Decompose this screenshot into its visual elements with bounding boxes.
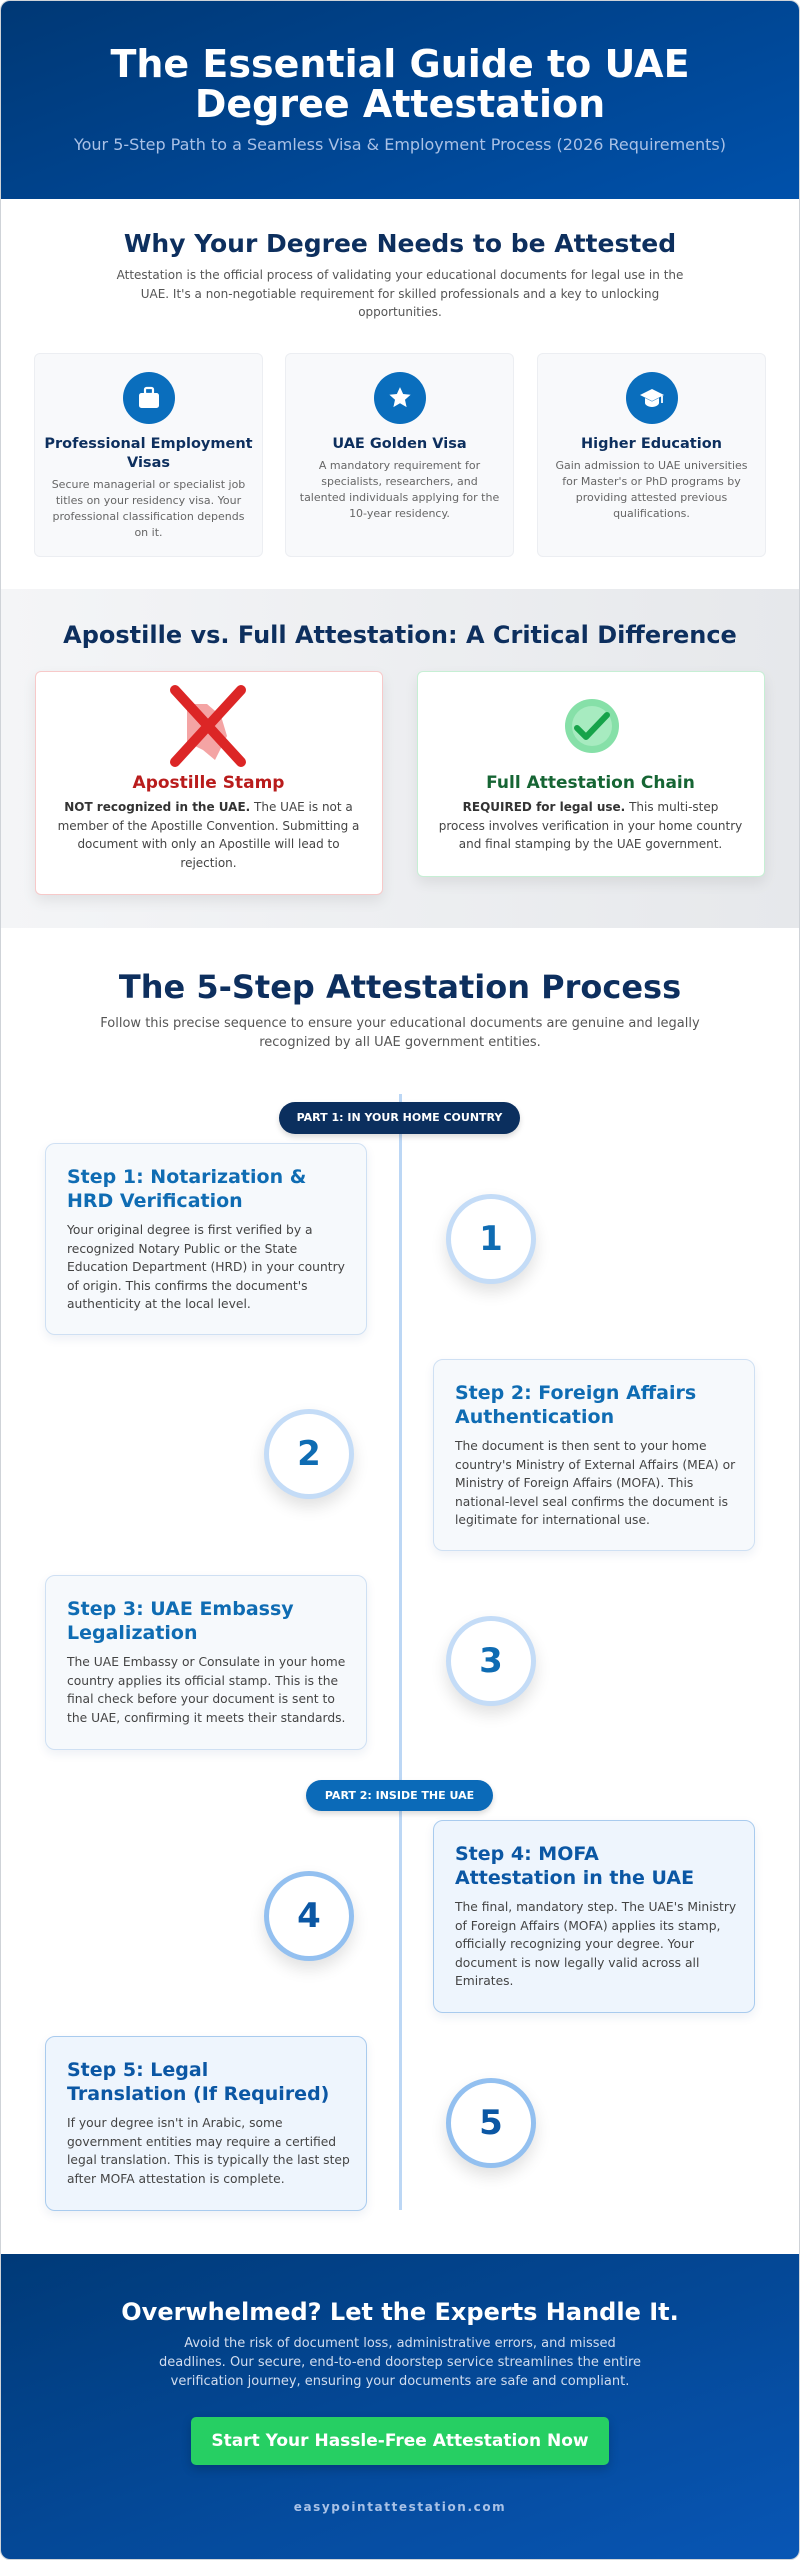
- card: higher education: providing attested previous: [576, 491, 727, 504]
- card: professional employment visas: Secure managerial or specialist job: [52, 478, 245, 491]
- step 5 card: Step 5: Legal: [67, 2059, 208, 2081]
- step 5 number: 5: [479, 2103, 503, 2143]
- apostille text: document with only an Apostille will lead to: [77, 837, 340, 851]
- heading: 5-step process: The 5-Step Attestation Process: [119, 968, 681, 1006]
- icon: check seal: [565, 699, 619, 753]
- process intro text: [100, 1016, 700, 1050]
- step 4 card: Emirates.: [455, 1974, 513, 1988]
- step 3 number: [446, 1616, 536, 1706]
- pill: part 1: [279, 1102, 520, 1134]
- title: Degree Attestation: [195, 82, 605, 126]
- step 2 card: Ministry of Foreign Affairs (MOFA). This: [455, 1476, 693, 1490]
- step 3 card: Step 3: UAE Embassy: [67, 1598, 294, 1620]
- icon: graduation cap: [626, 372, 678, 424]
- step 4 number: [264, 1871, 354, 1961]
- full attestation text: REQUIRED for legal use. This multi-step: [463, 800, 718, 814]
- icon: briefcase: [122, 372, 174, 424]
- process intro text: Follow this precise sequence to ensure your educational documents are genuine and legally: [100, 1016, 700, 1031]
- step 4 number: 4: [297, 1896, 321, 1936]
- CTA button: [191, 2417, 609, 2465]
- full attestation title: Full Attestation Chain: [486, 773, 695, 793]
- step 1 card: recognized Notary Public or the State: [67, 1242, 297, 1256]
- step 2 card: Step 2: Foreign Affairs: [455, 1382, 696, 1404]
- card: full attestation chain: [417, 671, 765, 877]
- card: higher education: Higher Education: [581, 436, 722, 452]
- CTA text: Avoid the risk of document loss, administrative errors, and missed: [184, 2336, 616, 2351]
- website url: easypointattestation.com: [294, 2500, 506, 2514]
- step 1 number: 1: [479, 1219, 503, 1259]
- step 1 card: Education Department (HRD) in your country: [67, 1260, 345, 1274]
- pill: part 1: PART 1: IN YOUR HOME COUNTRY: [297, 1111, 502, 1124]
- step 5 number: [446, 2078, 536, 2168]
- step 2 card: country's Ministry of External Affairs (MEA) or: [455, 1458, 735, 1472]
- card: golden visa: UAE Golden Visa: [332, 436, 467, 452]
- card: golden visa: A mandatory requirement for: [319, 459, 480, 472]
- card: professional employment visas: professional classification depends: [52, 510, 244, 523]
- step 1 card: of origin. This confirms the document's: [67, 1279, 308, 1293]
- step 5 card: after MOFA attestation is complete.: [67, 2172, 285, 2186]
- step 4 card: Attestation in the UAE: [455, 1867, 694, 1889]
- timeline line: [399, 1094, 402, 2210]
- card: golden visa: specialists, researchers, and: [321, 475, 478, 488]
- step 2 card: [433, 1359, 755, 1551]
- step 1 card: authenticity at the local level.: [67, 1297, 251, 1311]
- step 4 card: [433, 1820, 755, 2013]
- card: golden visa: [285, 353, 514, 557]
- step 3 card: country applies its official stamp. This is the: [67, 1674, 338, 1688]
- step 3 card: the UAE, confirming it meets their standards.: [67, 1711, 345, 1725]
- card: higher education: Gain admission to UAE universities: [555, 459, 748, 472]
- apostille text: member of the Apostille Convention. Submitting a: [58, 818, 359, 832]
- step 3 card: Legalization: [67, 1622, 198, 1644]
- step 5 card: [45, 2036, 367, 2211]
- step 2 number: [264, 1409, 354, 1499]
- full attestation text: and final stamping by the UAE government.: [459, 837, 722, 851]
- card: higher education: [537, 353, 766, 557]
- apostille text: rejection.: [180, 856, 237, 870]
- card: golden visa: talented individuals applying for the: [300, 491, 499, 504]
- apostille text: [58, 800, 359, 870]
- card: golden visa: 10-year residency.: [349, 507, 450, 520]
- CTA text: [159, 2336, 641, 2389]
- step 2 card: legitimate for international use.: [455, 1513, 650, 1527]
- step 4 card: The final, mandatory step. The UAE's Ministry: [455, 1900, 736, 1914]
- step 2 number: 2: [297, 1434, 321, 1474]
- card: professional employment visas: [34, 353, 263, 557]
- pill: part 2: PART 2: INSIDE THE UAE: [325, 1789, 474, 1802]
- intro text: [116, 268, 683, 319]
- card: apostille stamp: [35, 671, 383, 895]
- step 4 card: of Foreign Affairs (MOFA) applies its stamp,: [455, 1919, 720, 1933]
- CTA text: deadlines. Our secure, end-to-end doorstep service streamlines the entire: [159, 2355, 641, 2370]
- card: professional employment visas: on it.: [134, 526, 163, 539]
- full attestation text: process involves verification in your home country: [439, 818, 742, 832]
- step 4 card: Step 4: MOFA: [455, 1843, 599, 1865]
- step 2 card: The document is then sent to your home: [455, 1439, 707, 1453]
- step 5 card: If your degree isn't in Arabic, some: [67, 2116, 283, 2130]
- step 3 number: 3: [479, 1641, 503, 1681]
- apostille text: NOT recognized in the UAE. The UAE is not a: [64, 800, 353, 814]
- panel: apostille vs full attestation: [1, 589, 799, 928]
- title: [110, 42, 690, 126]
- step 5 card: Translation (If Required): [67, 2083, 329, 2105]
- step 1 number: [446, 1194, 536, 1284]
- icon: crossed stamp: [170, 685, 246, 767]
- CTA button: Start Your Hassle-Free Attestation Now: [211, 2431, 589, 2451]
- step 4 card: officially recognizing your degree. Your: [455, 1937, 694, 1951]
- full attestation text: [439, 800, 742, 851]
- pill: part 2: [306, 1780, 493, 1811]
- subtitle: Your 5-Step Path to a Seamless Visa & Employment Process (2026 Requirements): [74, 135, 726, 154]
- step 3 card: final check before your document is sent to: [67, 1692, 335, 1706]
- CTA text: verification journey, ensuring your documents are safe and compliant.: [171, 2374, 629, 2389]
- step 1 card: Step 1: Notarization &: [67, 1166, 306, 1188]
- step 2 card: Authentication: [455, 1406, 614, 1428]
- step 3 card: [45, 1575, 367, 1750]
- heading: apostille: Apostille vs. Full Attestation: A Critical Difference: [63, 621, 737, 649]
- CTA heading: Overwhelmed? Let the Experts Handle It.: [121, 2298, 679, 2326]
- title: The Essential Guide to UAE: [110, 42, 690, 86]
- intro text: UAE. It's a non-negotiable requirement for skilled professionals and a key to unlocking: [141, 287, 659, 301]
- step 2 card: national-level seal confirms the document is: [455, 1495, 728, 1509]
- header: [1, 1, 799, 199]
- apostille title: Apostille Stamp: [133, 773, 284, 793]
- step 3 card: The UAE Embassy or Consulate in your home: [67, 1655, 345, 1669]
- card: higher education: qualifications.: [613, 507, 690, 520]
- card: higher education: for Master's or PhD programs by: [562, 475, 741, 488]
- icon: star: [374, 372, 426, 424]
- card: professional employment visas: titles on your residency visa. Your: [56, 494, 241, 507]
- step 5 card: legal translation. This is typically the last step: [67, 2153, 350, 2167]
- intro text: opportunities.: [358, 305, 442, 319]
- card: professional employment visas: Visas: [127, 455, 170, 471]
- process intro text: recognized by all UAE government entities.: [259, 1035, 541, 1050]
- card: professional employment visas: Professional Employment: [44, 436, 253, 452]
- step 1 card: HRD Verification: [67, 1190, 243, 1212]
- heading: why: Why Your Degree Needs to be Attested: [124, 229, 676, 258]
- step 4 card: document is now legally valid across all: [455, 1956, 699, 1970]
- intro text: Attestation is the official process of validating your educational documents for legal use in the: [117, 268, 683, 282]
- step 1 card: [45, 1143, 367, 1335]
- step 5 card: government entities may require a certified: [67, 2135, 336, 2149]
- footer CTA panel: [1, 2254, 799, 2559]
- step 1 card: Your original degree is first verified by a: [67, 1223, 313, 1237]
